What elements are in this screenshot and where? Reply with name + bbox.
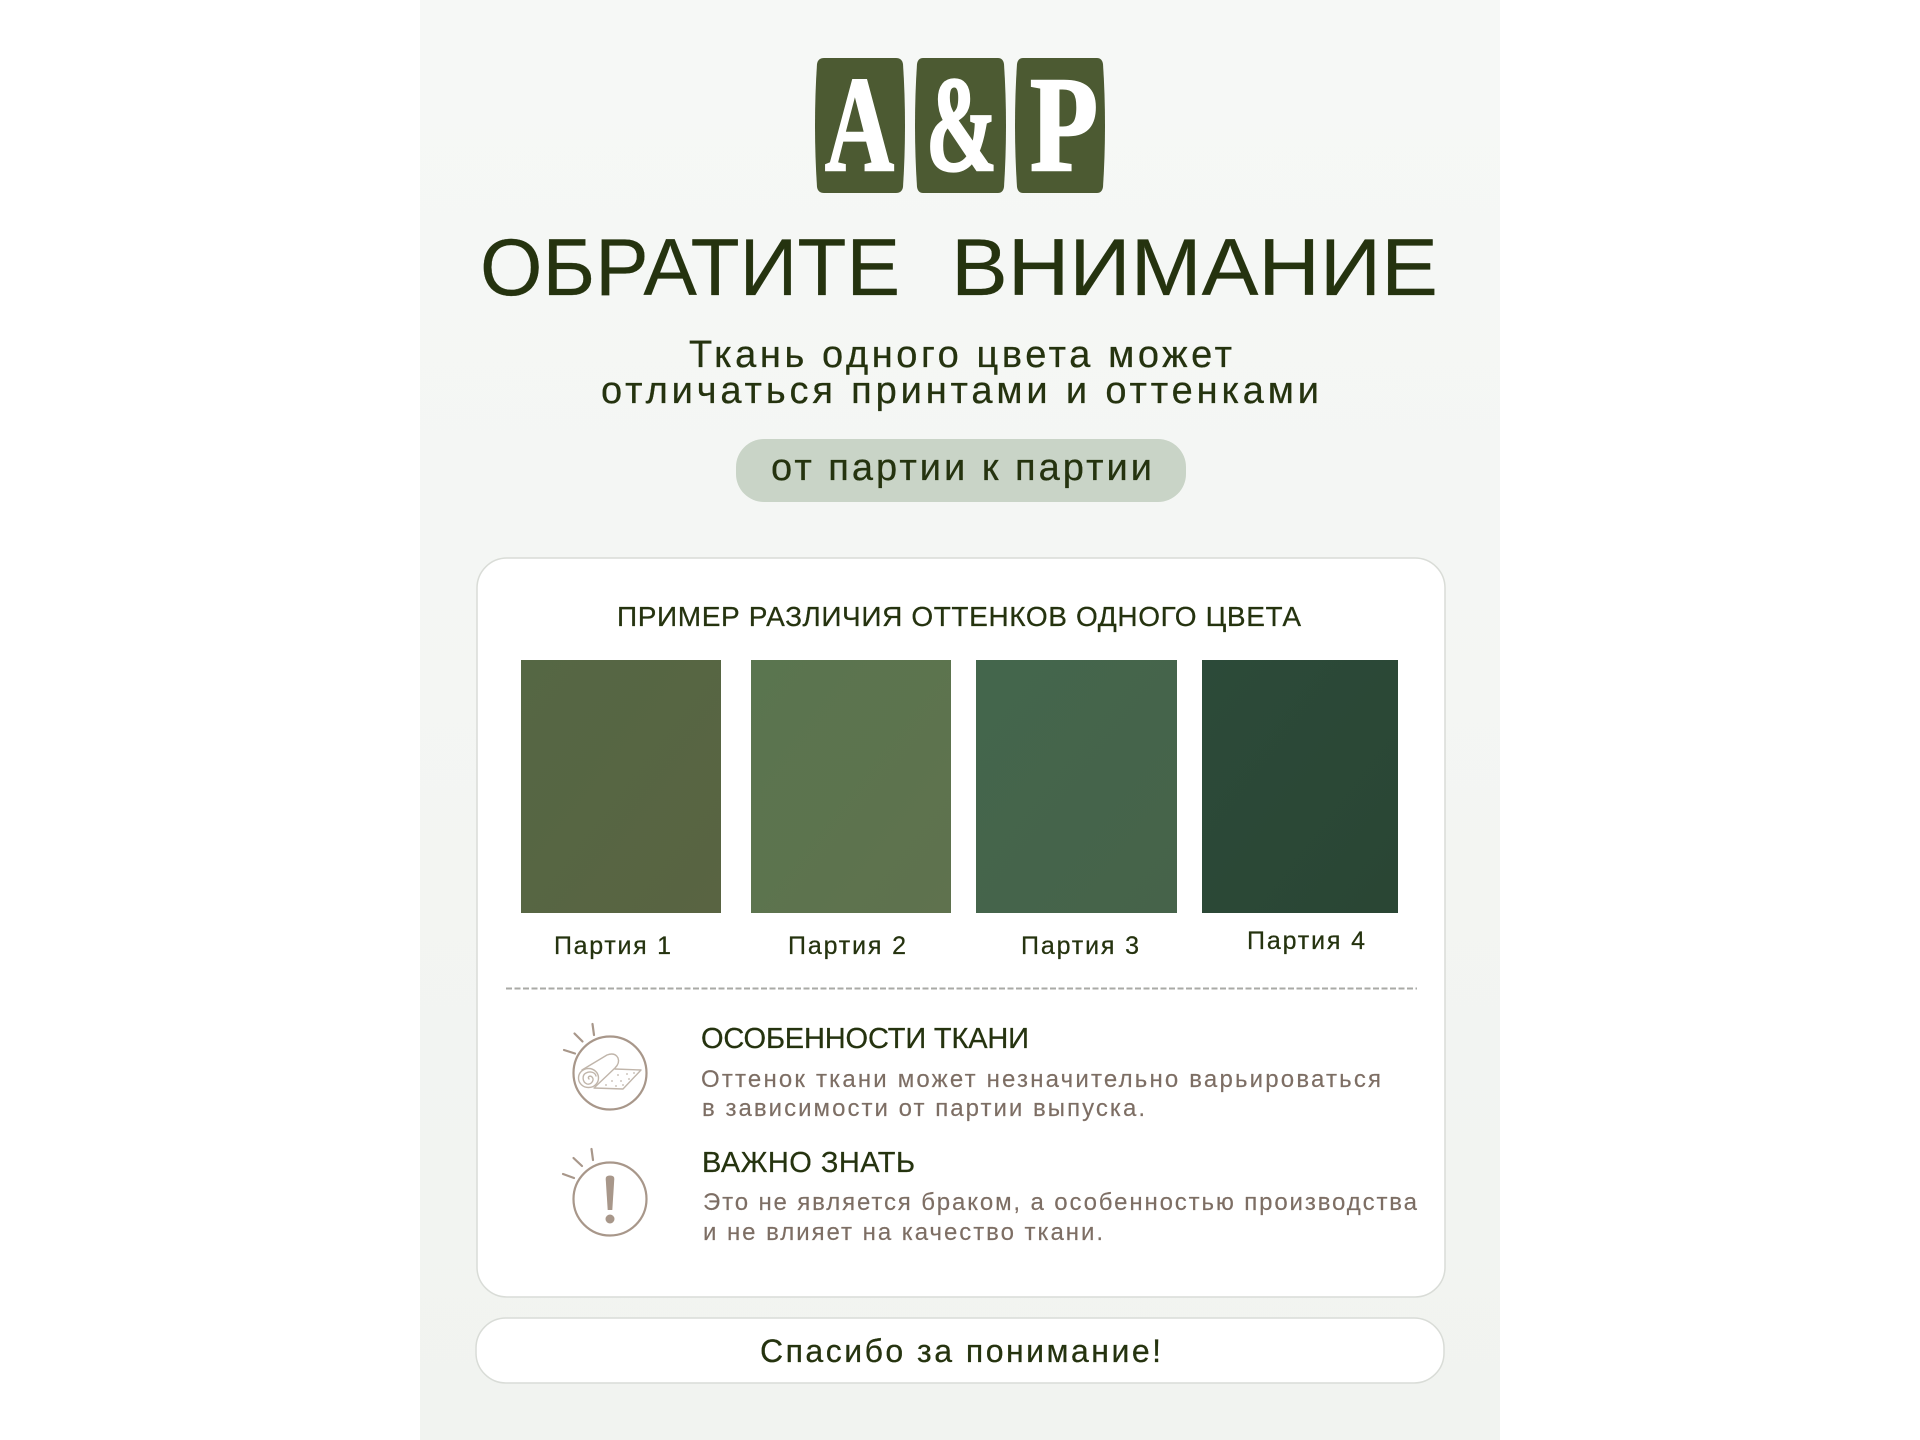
heading: ОБРАТИТЕ bbox=[480, 223, 900, 313]
text: fabric features: в зависимости от партии выпуска. bbox=[702, 1095, 1145, 1122]
icon: exclamation mark bbox=[563, 1149, 646, 1236]
heading: ВНИМАНИЕ bbox=[951, 223, 1438, 313]
subtitle: Ткань одного цвета может bbox=[689, 334, 1232, 376]
subtitle bbox=[601, 334, 1319, 412]
swatch: batch 4 bbox=[1202, 660, 1398, 913]
page background bbox=[420, 0, 1500, 1440]
label: batch 4: Партия 4 bbox=[1247, 927, 1365, 955]
text: important to know: Это не является браком, а особенностью производства bbox=[703, 1189, 1418, 1216]
logo: A&P: P bbox=[1030, 50, 1098, 200]
text: fabric features: Оттенок ткани может незначительно варьироваться bbox=[701, 1066, 1381, 1093]
text: important to know bbox=[703, 1189, 1418, 1246]
heading: fabric features: ОСОБЕННОСТИ ТКАНИ bbox=[701, 1023, 1029, 1055]
heading bbox=[480, 223, 1438, 313]
subtitle: отличаться принтами и оттенками bbox=[601, 370, 1319, 412]
panel: shade examples and notes bbox=[477, 558, 1445, 1297]
heading: important to know: ВАЖНО ЗНАТЬ bbox=[702, 1147, 915, 1179]
thank-you bar bbox=[476, 1318, 1444, 1383]
logo: A&P bbox=[815, 50, 1105, 200]
logo: A&P: A bbox=[825, 50, 894, 200]
text: fabric features bbox=[701, 1066, 1381, 1122]
label: batch 3: Партия 3 bbox=[1021, 932, 1139, 960]
label: batch 1: Партия 1 bbox=[554, 932, 671, 960]
icon: fabric roll bbox=[564, 1024, 646, 1110]
swatch: batch 2 bbox=[751, 660, 951, 913]
logo: A&P: & bbox=[926, 50, 997, 200]
text: important to know: и не влияет на качество ткани. bbox=[703, 1219, 1103, 1246]
pill: от партии к партии bbox=[736, 439, 1186, 502]
pill: от партии к партии: от партии к партии bbox=[771, 447, 1152, 489]
thank-you bar: Спасибо за понимание! bbox=[760, 1333, 1161, 1369]
label: batch 2: Партия 2 bbox=[788, 932, 906, 960]
swatch: batch 3 bbox=[976, 660, 1177, 913]
swatch: batch 1 bbox=[521, 660, 721, 913]
panel title: ПРИМЕР РАЗЛИЧИЯ ОТТЕНКОВ ОДНОГО ЦВЕТА bbox=[617, 601, 1301, 632]
